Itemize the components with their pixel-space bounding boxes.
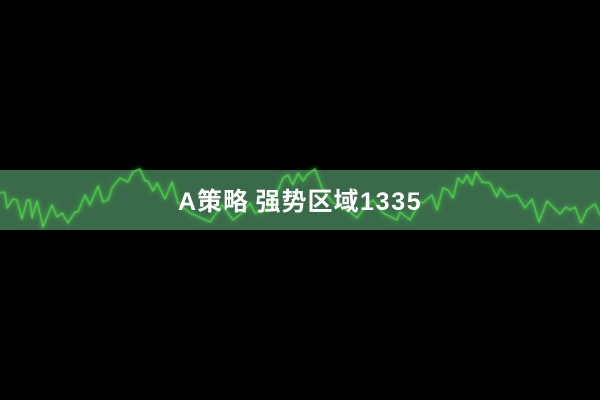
waveform line [0,169,600,227]
title: A策略 [178,188,249,216]
title: 1335 [360,188,422,216]
title: 强势区域 [256,188,360,216]
background band [0,170,600,230]
